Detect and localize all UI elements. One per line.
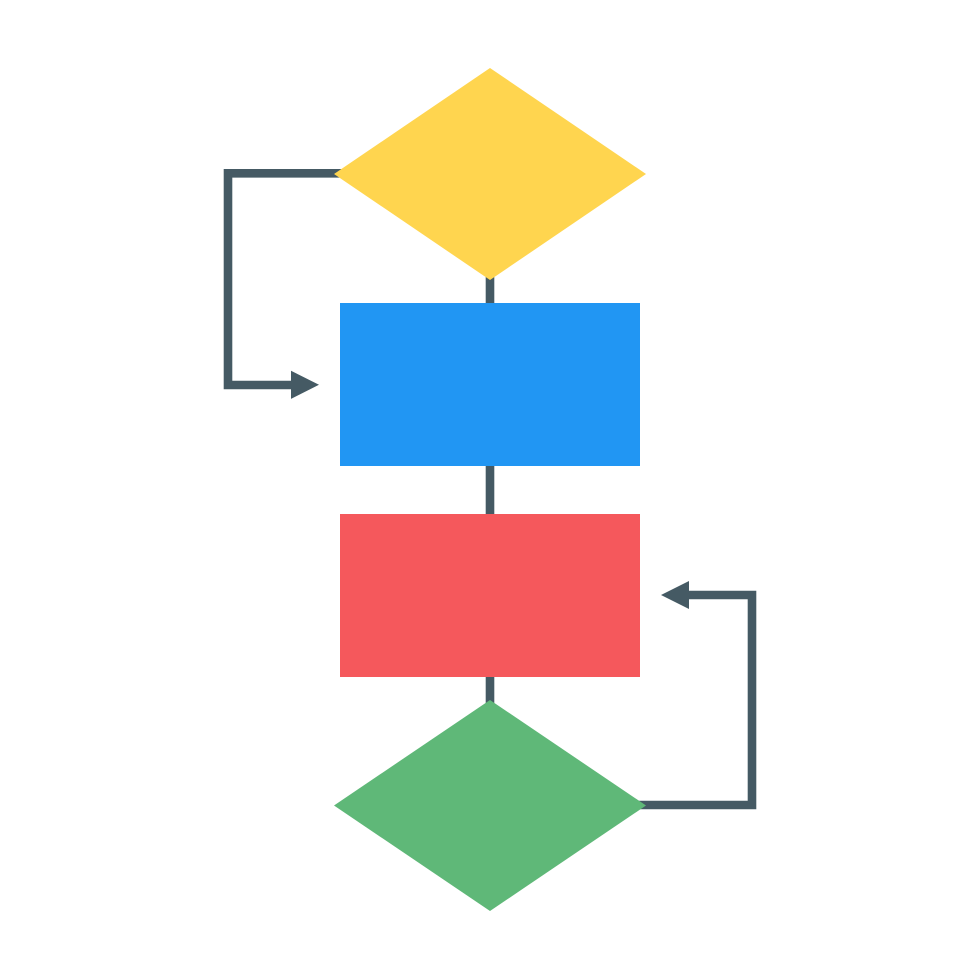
connector: blue box to red box bbox=[486, 460, 494, 520]
arrow: bottom diamond loop to red box bbox=[635, 581, 752, 805]
green decision diamond bbox=[334, 700, 646, 911]
blue process box bbox=[340, 303, 640, 466]
arrow: top diamond loop to blue box bbox=[228, 173, 345, 399]
yellow decision diamond bbox=[334, 68, 646, 280]
connector: red box to bottom diamond bbox=[486, 670, 494, 710]
connector: top diamond to blue box bbox=[486, 270, 494, 310]
red process box bbox=[340, 514, 640, 677]
